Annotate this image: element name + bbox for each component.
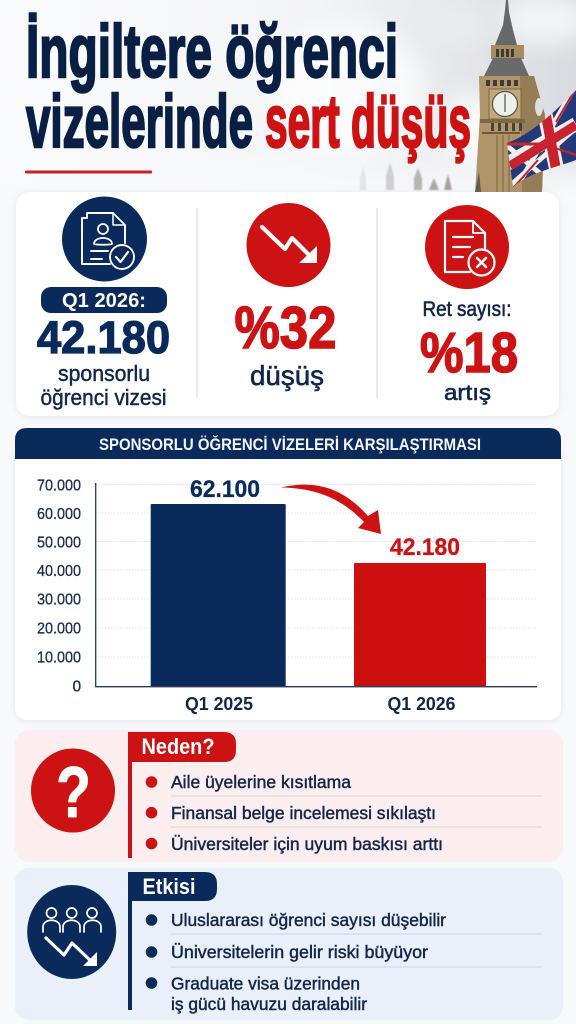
icon: falling arrow [246,203,330,287]
category label: Q1 2025: Q1 2025 [185,694,253,714]
stat description: sponsorlu [58,361,150,386]
panel: effects [15,868,563,1020]
value: 62.100: 62.100 [190,476,260,503]
bar: Q1 2026 [354,563,486,686]
title [26,10,471,163]
y axis labels: 30.000 [37,592,81,608]
y axis labels: 10.000 [37,650,81,666]
y axis labels: 70.000 [37,478,81,494]
Union Jack flag [507,90,576,187]
stat description [40,361,166,410]
list: effects: Graduate visa üzerinden [171,974,360,994]
icon: document with check [62,196,147,282]
list: effects [146,910,542,1014]
category label: Q1 2026: Q1 2026 [388,694,456,714]
list: effects: Üniversitelerin gelir riski büyüyor [171,942,428,962]
list: effects: iş gücü havuzu daralabilir [171,994,367,1014]
icon: question mark [31,748,115,833]
Q1 2026 label pill [41,287,167,313]
panel: visa comparison chart [15,428,561,720]
label: düşüş: düşüş [250,360,324,391]
label: artış: artış [444,380,491,405]
heading tab: Neden [128,732,236,858]
icon: people and falling arrow [27,885,116,979]
number %32: %32 [234,295,336,361]
chart heading: SPONSORLU ÖĞRENCİ VİZELERİ KARŞILAŞTIRMASI [99,435,481,454]
Big Ben tower [475,0,545,192]
title underline [25,170,152,174]
stat: refusals up 18 percent [420,205,518,405]
distant skyline spires [360,162,452,190]
y axis labels: 20.000 [37,620,81,638]
y axis labels: 50.000 [37,534,81,552]
chart heading [15,428,561,459]
arrow: decline between bars [281,485,381,534]
list: reasons: Finansal belge incelemesi sıkılaştı [171,803,436,823]
y axis labels [37,478,82,696]
header photo: sky, Big Ben and flag [346,0,576,192]
panel: key statistics [16,192,559,416]
stat description: öğrenci vizesi [40,385,166,410]
value: 42.180: 42.180 [390,534,460,561]
list: reasons: Aile üyelerine kısıtlama [171,772,351,792]
number 42.180: 42.180 [37,312,170,363]
list: reasons: Üniversiteler için uyum baskısı arttı [171,834,443,854]
list: effects: Uluslararası öğrenci sayısı düşebilir [171,910,446,930]
axes [96,483,537,687]
list: reasons [146,772,542,854]
number %18: %18 [420,321,518,385]
Q1 2026 label pill: Q1 2026: [62,290,146,312]
heading tab: Neden: Neden? [142,734,214,759]
heading tab: Etkisi: Etkisi [142,874,196,899]
gridlines [96,484,536,657]
y axis labels: 0 [72,678,82,696]
stat: sponsored visas [37,196,170,410]
y axis labels: 60.000 [37,506,81,523]
stat: 32 percent drop [234,203,336,391]
y axis labels: 40.000 [37,563,81,580]
panel: reasons [15,730,563,862]
bar: Q1 2025 [151,504,286,686]
icon: question mark: ? [56,753,91,833]
title: vizelerinde [26,80,253,163]
heading tab: Etkisi [128,872,217,1010]
icon: rejected document [425,205,509,289]
label: Ret sayısı: Ret sayısı: [422,298,512,321]
